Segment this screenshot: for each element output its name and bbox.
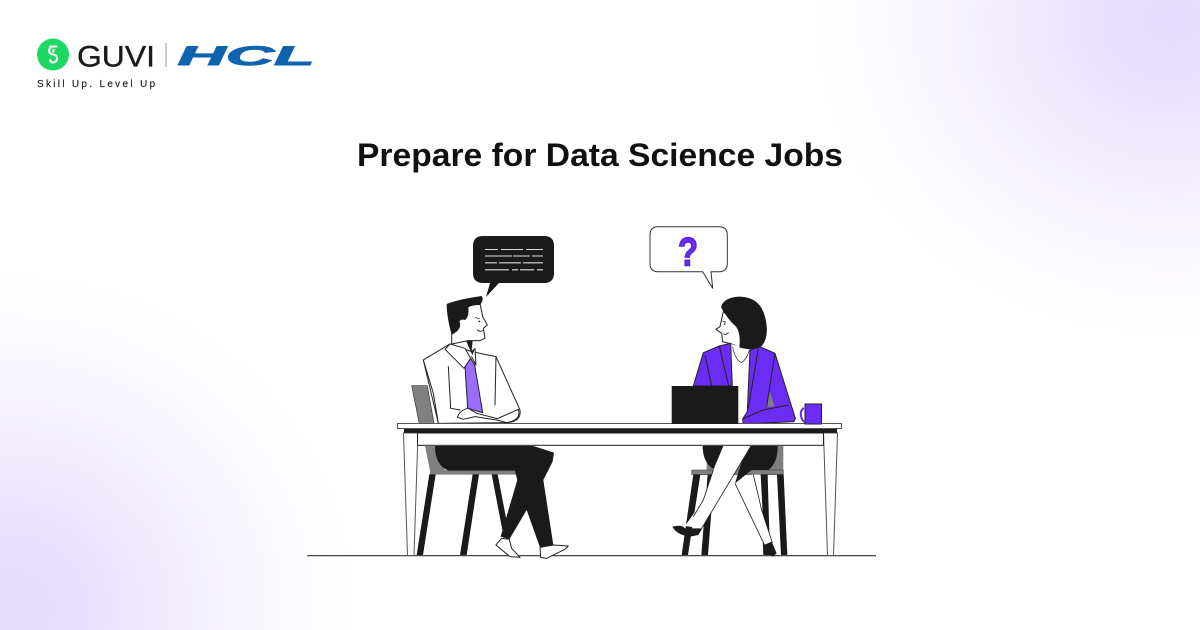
floor line — [307, 555, 876, 557]
GUVI wordmark: GUVI — [77, 40, 155, 74]
laptop — [672, 386, 738, 424]
table — [398, 424, 842, 556]
icon: GUVI green circle — [37, 38, 69, 70]
icon: mug — [801, 404, 822, 424]
HCL wordmark: HCL — [178, 41, 315, 71]
woman's torso and head — [693, 297, 795, 424]
title: Prepare for Data Science Jobs — [357, 137, 843, 173]
tagline: Skill Up. Level Up — [37, 79, 157, 90]
woman's legs — [672, 446, 778, 557]
man's torso, head and tie — [423, 296, 520, 423]
woman — [672, 297, 795, 557]
woman's chair — [682, 446, 787, 555]
table dark bar — [404, 428, 837, 433]
table legs — [404, 433, 418, 556]
speech bubble: man — [473, 236, 554, 297]
speech bubble: woman — [650, 227, 727, 288]
logo: GUVI and HCL — [37, 38, 315, 90]
man's chair — [417, 446, 516, 555]
table top — [398, 424, 842, 428]
man — [423, 296, 568, 558]
question mark: ? — [678, 229, 698, 274]
table apron — [418, 433, 824, 445]
man's legs — [435, 446, 568, 558]
